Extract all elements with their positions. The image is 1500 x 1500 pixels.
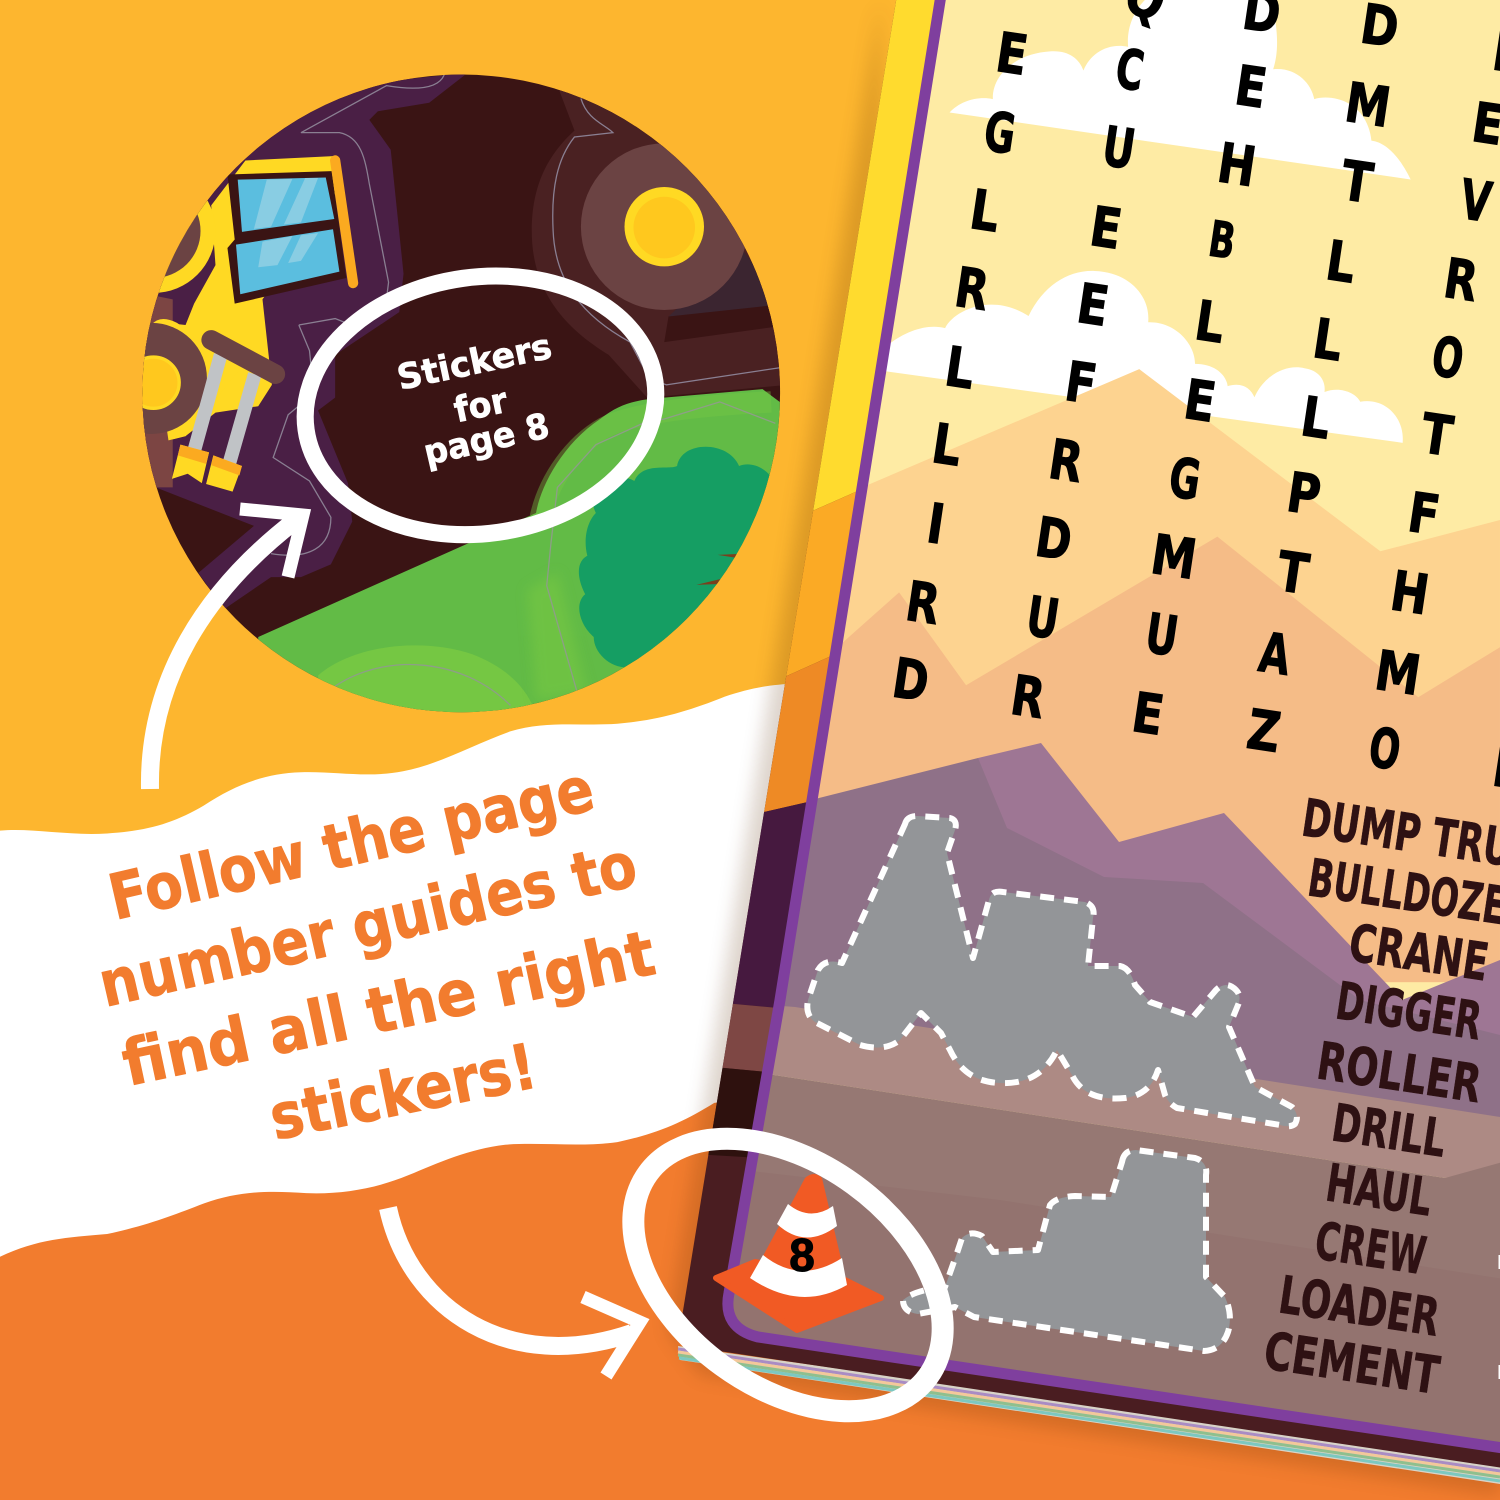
word search letters: R — [1045, 427, 1087, 495]
sticker label text: for — [450, 380, 512, 431]
word search letters: L — [966, 177, 1004, 245]
word search letters: E — [1073, 271, 1113, 339]
piston cross bar — [211, 340, 275, 374]
word search letters: C — [1111, 37, 1148, 105]
word search letters: U — [1022, 586, 1063, 653]
tyre — [581, 143, 748, 310]
cone stripe lower — [750, 1255, 847, 1297]
word search letters: E — [1180, 367, 1220, 435]
window frame — [227, 171, 346, 304]
word search letters: M — [1147, 522, 1201, 592]
headline text: find all the right — [116, 917, 661, 1101]
word search letters: T — [1337, 148, 1377, 216]
word search letters: P — [1283, 460, 1325, 528]
headline text — [92, 752, 661, 1155]
word search letters: G — [980, 100, 1020, 168]
cone base — [716, 1262, 881, 1330]
word search letters: L — [1297, 384, 1335, 452]
word search letters: L — [941, 334, 979, 402]
word list: DRILL — [1328, 1094, 1450, 1170]
tree — [578, 446, 770, 668]
sticker cut lines — [271, 75, 444, 555]
word search letters: L — [928, 411, 966, 479]
light green sticker halos — [318, 645, 536, 714]
word list — [1260, 789, 1500, 1407]
word search letters: I — [923, 491, 949, 557]
word search letters: G — [1165, 446, 1205, 514]
sky — [772, 0, 1500, 1178]
word search letters: E — [992, 20, 1032, 88]
green grass — [258, 389, 780, 712]
purple hills — [978, 743, 1500, 1035]
traffic cone page number — [716, 1174, 881, 1330]
word search letters: R — [1007, 663, 1049, 731]
word search letters: V — [1456, 169, 1495, 236]
word search letters: M — [1371, 638, 1425, 708]
lower digger wheel — [142, 323, 207, 434]
arrow: banner to sticker circle — [150, 509, 303, 789]
digger yellow body — [147, 156, 339, 440]
background: yellow top — [0, 0, 1500, 1000]
zoomed sticker sheet circle — [142, 74, 780, 712]
sticker silhouette: digger — [807, 816, 1297, 1126]
word list: HAUL — [1322, 1154, 1436, 1229]
word search letters: E — [1231, 53, 1271, 121]
amber window bar — [335, 160, 353, 283]
word search letters: F — [1404, 480, 1444, 548]
headline text: Follow the page — [102, 752, 601, 935]
word search letters: L — [1309, 306, 1347, 374]
word search letters: B — [1205, 211, 1239, 272]
page number 8: 8 — [789, 1229, 815, 1281]
book page edges stack — [678, 1346, 1500, 1484]
word search letters: T — [1273, 539, 1313, 607]
headline text: number guides to — [92, 828, 643, 1022]
sticker label text — [393, 326, 555, 474]
word search letters: O — [1365, 715, 1405, 783]
word search letters: M — [1341, 70, 1395, 140]
word search letters: D — [888, 645, 933, 715]
word search letters: A — [1255, 622, 1294, 689]
book spine and bands — [660, 0, 1500, 1495]
dark bar — [664, 306, 773, 342]
word search letters: L — [1191, 288, 1229, 356]
background: orange bottom — [0, 1000, 1500, 1500]
tyre hub — [625, 187, 704, 266]
book page scene — [700, 0, 1500, 1480]
yellow feet — [172, 445, 209, 483]
grass cut lines — [335, 402, 775, 705]
word search letters: E — [1086, 194, 1126, 262]
white highlight ellipse — [288, 254, 673, 557]
arrow: banner to page number — [388, 1208, 640, 1376]
brown tyre halo — [532, 86, 788, 398]
left brown panel — [142, 296, 173, 488]
word list: CREW — [1311, 1212, 1430, 1287]
word search letters: U — [1141, 603, 1182, 670]
sticker label text: Stickers — [393, 326, 555, 399]
tree trunk bits — [696, 554, 736, 585]
word search letters: F — [1061, 349, 1101, 417]
word search letters: E — [1128, 680, 1168, 748]
small dashes at right edge — [1498, 1255, 1500, 1379]
sticker silhouette: bulldozer — [903, 1150, 1230, 1351]
cone body — [750, 1174, 846, 1296]
word search letters — [888, 0, 1500, 804]
word search letters: L — [1322, 228, 1360, 296]
book drop shadow — [668, 0, 1500, 1495]
purple page border — [728, 0, 1500, 1449]
upper digger wheel — [158, 200, 214, 293]
sticker label text: page 8 — [420, 405, 553, 474]
rose ground band — [772, 1006, 1500, 1178]
headline text: stickers! — [264, 1030, 543, 1155]
word search letters: R — [1440, 246, 1482, 314]
word search letters: T — [1417, 401, 1457, 469]
word search letters: R — [902, 569, 944, 637]
highlight ellipse around page number — [582, 1083, 994, 1467]
word search letters: O — [1428, 324, 1468, 392]
word search letters: H — [1386, 558, 1433, 628]
dark corner — [669, 252, 770, 316]
purple sticker halo — [130, 73, 468, 609]
taupe ground — [756, 1074, 1500, 1278]
word search letters: Z — [1243, 697, 1285, 765]
arm yellow — [153, 319, 186, 440]
word search letters: U — [1098, 116, 1139, 183]
word search letters: R — [951, 255, 993, 323]
word list: CEMENT — [1260, 1322, 1443, 1407]
word search letters: D — [1031, 504, 1076, 574]
pistons — [194, 355, 255, 464]
word search letters: H — [1213, 130, 1260, 200]
dark base — [130, 60, 800, 730]
white wavy banner — [0, 683, 796, 1258]
clouds and peach mountains — [755, 0, 1500, 982]
cone stripe upper — [777, 1204, 837, 1238]
window glass — [236, 178, 339, 294]
